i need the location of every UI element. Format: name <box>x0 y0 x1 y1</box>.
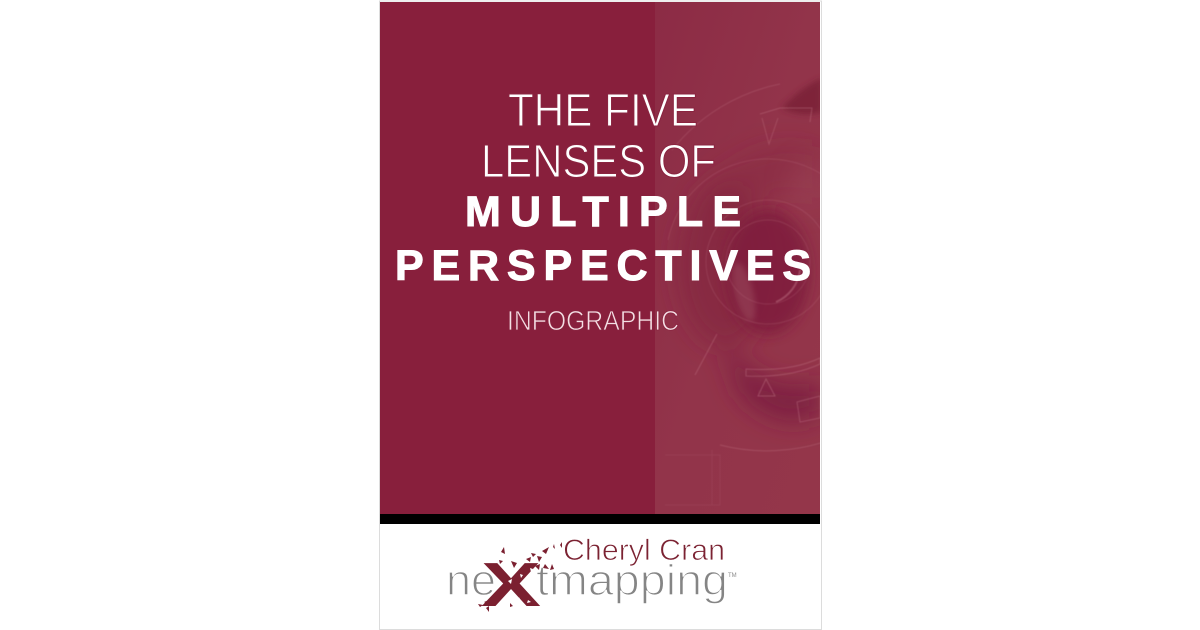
logo text: tmapping: tmapping <box>536 556 728 605</box>
upper eyelid <box>782 78 822 114</box>
logo text: ne: ne <box>446 556 496 605</box>
panel: crimson background <box>380 2 820 514</box>
title <box>395 84 811 290</box>
iris <box>726 210 810 334</box>
logo shards <box>478 542 562 612</box>
logo letter: X: X <box>481 551 541 620</box>
cover page <box>380 1 830 630</box>
logo <box>446 534 737 620</box>
panel: eye image <box>655 2 830 514</box>
logo text: Cheryl Cran: Cheryl Cran <box>563 534 725 567</box>
lighter sclera <box>799 176 814 192</box>
eye socket shading <box>686 183 820 429</box>
logo text: trademark: TM <box>728 573 737 579</box>
logo flecks <box>508 568 533 603</box>
black band <box>380 514 820 524</box>
title line: PERSPECTIVES: PERSPECTIVES <box>395 242 811 290</box>
title line: MULTIPLE: MULTIPLE <box>465 188 741 236</box>
title line: THE FIVE: THE FIVE <box>508 84 698 136</box>
title line: LENSES OF: LENSES OF <box>481 135 716 187</box>
subtitle: INFOGRAPHIC <box>507 305 679 336</box>
technology rings <box>668 84 820 452</box>
